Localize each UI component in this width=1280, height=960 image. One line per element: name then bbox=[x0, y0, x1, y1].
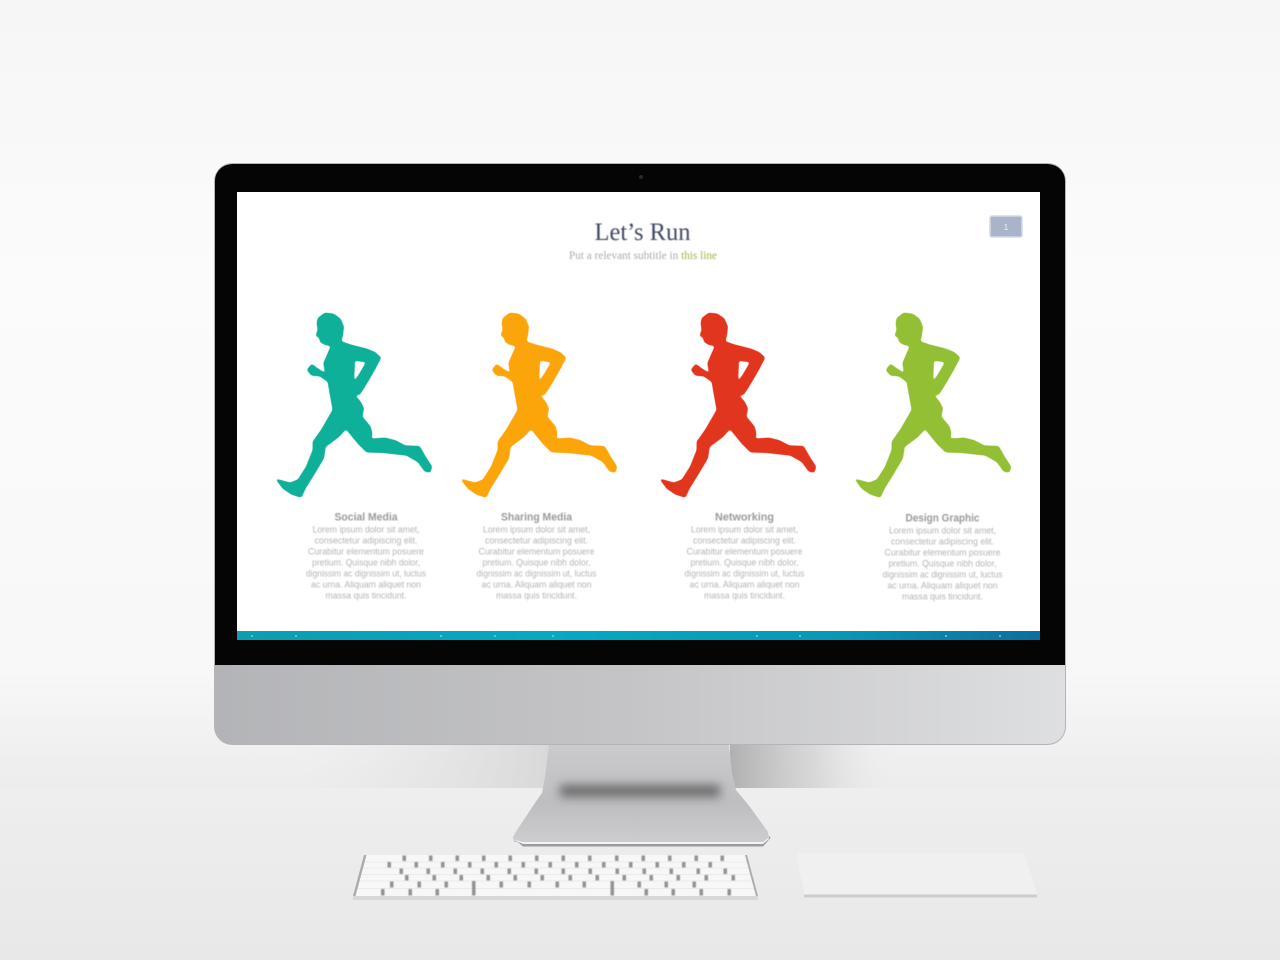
text block: Sharing Media: dignissim ac dignissim ut, luctus bbox=[476, 568, 597, 580]
text block: Networking: massa quis tincidunt. bbox=[704, 590, 785, 602]
text block: Social Media: Curabitur elementum posuere bbox=[308, 546, 424, 558]
keyboard bbox=[353, 855, 758, 900]
text block: Design Graphic: Design Graphic bbox=[906, 512, 980, 524]
text block: Sharing Media: Lorem ipsum dolor sit amet, bbox=[483, 524, 590, 536]
text block: Sharing Media bbox=[476, 512, 597, 602]
text block: Social Media: pretium. Quisque nibh dolor, bbox=[312, 558, 420, 568]
text block: Social Media: Social Media bbox=[334, 512, 398, 524]
runner 3: red bbox=[660, 313, 816, 497]
slide title: Let’s Run bbox=[594, 219, 691, 246]
text block: Design Graphic: ac urna. Aliquam aliquet non bbox=[888, 580, 998, 592]
text block: Networking bbox=[684, 512, 805, 602]
text block: Networking: Lorem ipsum dolor sit amet, bbox=[691, 524, 798, 536]
monitor body and chin bbox=[214, 164, 1066, 744]
text block: Networking: pretium. Quisque nibh dolor, bbox=[690, 558, 798, 568]
text block: Sharing Media: massa quis tincidunt. bbox=[496, 590, 577, 602]
text block: Sharing Media: consectetur adipiscing elit. bbox=[485, 536, 588, 546]
text block: Design Graphic bbox=[882, 512, 1003, 602]
webcam bbox=[639, 175, 643, 179]
text block: Networking: dignissim ac dignissim ut, luctus bbox=[684, 568, 805, 580]
monitor stand bbox=[513, 744, 770, 846]
slide footer band bbox=[237, 631, 1040, 640]
text block: Sharing Media: Curabitur elementum posuere bbox=[478, 546, 594, 558]
text block: Networking: consectetur adipiscing elit. bbox=[693, 536, 796, 546]
runner 1: teal bbox=[276, 313, 432, 497]
text block: Social Media: massa quis tincidunt. bbox=[326, 590, 406, 602]
text block: Networking: Curabitur elementum posuere bbox=[686, 546, 802, 558]
page number badge bbox=[990, 216, 1022, 237]
text block: Design Graphic: Curabitur elementum posuere bbox=[884, 548, 1000, 558]
monitor bbox=[214, 164, 1066, 744]
text block: Networking: Networking bbox=[715, 512, 774, 524]
text block: Design Graphic: massa quis tincidunt. bbox=[902, 592, 983, 602]
text block: Sharing Media: ac urna. Aliquam aliquet non bbox=[482, 580, 592, 590]
text block: Social Media: ac urna. Aliquam aliquet non bbox=[311, 580, 421, 590]
text block: Social Media bbox=[306, 512, 426, 602]
trackpad bbox=[797, 853, 1037, 898]
page number badge: 1 bbox=[1004, 222, 1009, 232]
text block: Design Graphic: pretium. Quisque nibh dolor, bbox=[888, 558, 996, 570]
text block: Social Media: consectetur adipiscing elit. bbox=[314, 536, 418, 546]
text block: Networking: ac urna. Aliquam aliquet non bbox=[690, 580, 800, 590]
runner 4: green bbox=[856, 313, 1010, 497]
text block: Sharing Media: Sharing Media bbox=[501, 512, 573, 524]
slide screen bbox=[237, 192, 1040, 632]
text block: Social Media: Lorem ipsum dolor sit amet, bbox=[312, 524, 420, 536]
text block: Sharing Media: pretium. Quisque nibh dolor, bbox=[482, 558, 590, 568]
runner 2: orange bbox=[462, 313, 616, 497]
text block: Design Graphic: consectetur adipiscing elit. bbox=[891, 536, 994, 548]
monitor black bezel bbox=[215, 164, 1065, 665]
slide subtitle: Put a relevant subtitle in this line bbox=[569, 250, 717, 262]
text block: Social Media: dignissim ac dignissim ut, luctus bbox=[306, 568, 426, 580]
text block: Design Graphic: dignissim ac dignissim ut, luctus bbox=[882, 570, 1003, 580]
text block: Design Graphic: Lorem ipsum dolor sit amet, bbox=[889, 526, 996, 536]
